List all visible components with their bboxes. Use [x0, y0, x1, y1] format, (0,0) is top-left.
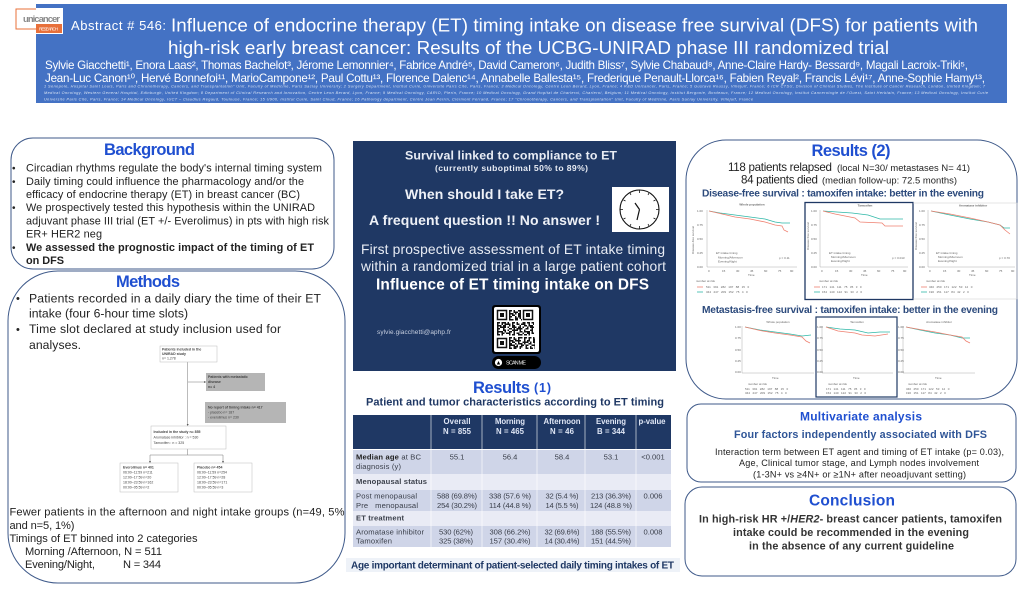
chart: DFS aromatase inhibitor: 0.50: [919, 237, 925, 241]
relapse and death counts: 84 patients died: [741, 174, 818, 186]
flowchart: placebo arm: 12:00–17:59 n=28: [197, 476, 225, 480]
heading: multivariate analysis: Multivariate analysis: [800, 410, 922, 424]
chart: MFS whole population: [735, 320, 814, 395]
chart: MFS tamoxifen (highlighted): 0.50: [817, 348, 823, 352]
panel: conclusion: [685, 487, 1016, 576]
chart: DFS whole population: 0.75: [697, 223, 703, 227]
chart: DFS whole population: Evening/Night: [718, 260, 737, 264]
flowchart: placebo arm: Placebo n= 454: [197, 466, 222, 470]
chart: DFS whole population: 15: [722, 269, 726, 273]
table rows: post and pre menopausal: 213 (36.3%): [591, 492, 631, 500]
flowchart: placebo arm: 06:00–11:59 n=254: [197, 470, 227, 474]
table row: median age: 58.4: [555, 452, 569, 462]
table header row: N = 465: [496, 427, 525, 436]
chart: MFS aromatase inhibitor: [898, 320, 975, 395]
table row: menopausal status: Menopausal status: [356, 477, 427, 486]
chart: MFS aromatase inhibitor: 190 151 117 84 42 2 0: [906, 391, 946, 395]
table rows: post and pre menopausal: 32 (5.4 %): [546, 492, 579, 500]
chart: DFS whole population: Whole population: [739, 202, 765, 206]
relapse and death counts: 118 patients relapsed: [728, 161, 832, 174]
chart: DFS aromatase inhibitor: ET intake timing: [936, 251, 958, 255]
chart: MFS whole population: Time: [772, 376, 779, 380]
chart: MFS tamoxifen (highlighted): 0.00: [817, 370, 823, 374]
chart: MFS whole population: 511 391 282 197 88 15 0: [745, 387, 788, 391]
affiliations: Medical Oncology, Western General Hospital, Edinburgh, United Kingdom; 8 Department of Clinical Research and Innovation, Centre Leon Berard, Lyon, France; 9 Medical Oncology, CARIO, Plerin, France; 10 Medical Oncology, Grand Hopital de Charleroi, Charleroi, Belgium; 11 Medical Oncology, Institut Bergonie, Bordeaux, France; 12 Medical Oncology, Institut Cancerologie de l'Ouest, Saint Herblain, France; 13 Medical Oncology, Institut Curie: [44, 91, 988, 95]
table row: median age: Median age at BC: [356, 452, 422, 462]
table row: median age: 55.1: [450, 452, 464, 462]
table rows: aromatase inhibitor and tamoxifen: Tamoxifen: [356, 536, 392, 546]
methods bullets: •: [16, 293, 20, 305]
table rows: aromatase inhibitor and tamoxifen: 188 (55.5%): [591, 528, 631, 536]
chart: DFS tamoxifen (highlighted): 90: [903, 269, 907, 273]
chart: DFS whole population: 511 391 282 197 88 15 0: [706, 285, 749, 289]
authors: Sylvie Giacchetti¹, Enora Laas², Thomas Bachelot³, Jérome Lemonnier⁴, Fabrice André⁵, David Cameron⁶, Judith Bliss⁷, Sylvie Chabaud⁸, Anne-Claire Hardy- Bessard⁹, Magali Lacroix-Triki⁵,: [45, 59, 968, 72]
chart: MFS tamoxifen (highlighted): Time: [853, 376, 860, 380]
title: Abstract # 546:: [71, 18, 166, 33]
table header row: [443, 417, 666, 436]
flowchart: patients included: [160, 346, 217, 362]
chart: MFS whole population: number at risk: [748, 382, 768, 386]
chart: MFS aromatase inhibitor: 1.00: [898, 325, 904, 329]
background bullet list: efficacy of endocrine therapy (ET) in breast cancer (BC): [26, 189, 300, 201]
study description: [360, 242, 666, 294]
table header row: Afternoon: [544, 417, 581, 426]
methods summary text: N = 344: [123, 559, 161, 571]
table rows: aromatase inhibitor and tamoxifen: [356, 528, 662, 546]
flowchart: patients included: n= 1,278: [162, 356, 176, 360]
chart: DFS aromatase inhibitor: 0.75: [919, 223, 925, 227]
flowchart: everolimus arm: [120, 463, 178, 492]
table row: median age: diagnosis (y): [356, 462, 401, 471]
table rows: aromatase inhibitor and tamoxifen: 14 (30.4%): [544, 536, 580, 546]
chart: DFS aromatase inhibitor: [913, 203, 1017, 299]
chart: DFS tamoxifen (highlighted): 60: [877, 269, 881, 273]
background bullet list: on DFS: [26, 255, 64, 267]
chart: DFS whole population: 0.25: [697, 251, 703, 255]
chart: DFS whole population: 0.00: [697, 265, 703, 269]
methods bullets: analyses.: [29, 338, 81, 352]
chart: MFS tamoxifen (highlighted): 171 141 111 75 35 3 0: [826, 387, 866, 391]
methods summary text: and n=5, 1%): [10, 520, 74, 532]
chart: MFS aromatase inhibitor: 0.50: [898, 348, 904, 352]
chart: DFS aromatase inhibitor: Aromatase inhibitor: [959, 204, 988, 208]
chart: MFS aromatase inhibitor: number at risk: [908, 382, 928, 386]
chart: MFS whole population: 1.00: [735, 325, 741, 329]
chart: DFS aromatase inhibitor: 30: [957, 269, 961, 273]
table row: ET treatment: ET treatment: [356, 514, 404, 522]
methods summary text: Evening/Night,: [25, 559, 95, 571]
flowchart: patients included: UNIRAD study: [162, 352, 186, 356]
compliance heading: (currently suboptimal 50% to 89%): [435, 163, 588, 173]
chart: DFS whole population: number at risk: [696, 279, 716, 283]
multivariate text: (1-3N+ vs ≥4N+ or ≥1N+ after neoadjuvant setting): [753, 470, 966, 480]
study description: First prospective assessment of ET intake timing: [361, 242, 665, 257]
chart: DFS tamoxifen (highlighted): Morning/Afternoon: [831, 255, 856, 259]
table row: median age: <0.001: [641, 452, 665, 462]
chart: DFS tamoxifen (highlighted): Evening/Night: [831, 259, 850, 263]
table rows: aromatase inhibitor and tamoxifen: 530 (62%): [439, 528, 473, 536]
chart: MFS whole population: 0.00: [735, 370, 741, 374]
flowchart: metastatic exclusion: disease: [208, 380, 221, 384]
chart: DFS aromatase inhibitor: 90: [1011, 269, 1015, 273]
chart: DFS aromatase inhibitor: 75: [999, 269, 1003, 273]
methods bullets: •: [16, 324, 20, 336]
results 1 heading: [366, 379, 664, 408]
chart: MFS aromatase inhibitor: Time: [935, 376, 942, 380]
methods bullets: Patients recorded in a daily diary the time of their ET: [29, 292, 322, 306]
conclusion text: in the absence of any current guideline: [749, 540, 954, 552]
multivariate text: Interaction term between ET agent and timing of ET intake (p= 0.03),: [715, 447, 1004, 457]
panel: survival and compliance: [353, 141, 676, 371]
flowchart: everolimus arm: Everolimus n= 401: [123, 466, 154, 470]
background bullet list: We assessed the prognostic impact of the timing of ET: [26, 242, 314, 254]
compliance heading: [405, 148, 617, 173]
chart: DFS whole population: 60: [764, 269, 768, 273]
chart: DFS tamoxifen (highlighted): 30: [849, 269, 853, 273]
table header row: p-value: [638, 417, 666, 426]
question text: When should I take ET?: [405, 186, 564, 202]
chart: MFS tamoxifen (highlighted): Tamoxifen: [850, 320, 864, 324]
chart: DFS tamoxifen (highlighted): ET intake timing: [829, 251, 851, 255]
chart: DFS tamoxifen (highlighted): number at risk: [819, 279, 839, 283]
chart: DFS tamoxifen (highlighted): 154 140 122 91 33 2 0: [822, 290, 862, 294]
chart: DFS whole population: 90: [790, 269, 794, 273]
title: [71, 14, 978, 58]
chart: MFS aromatase inhibitor: 340 250 171 122 53 12 0: [906, 387, 950, 391]
conclusion text: In high-risk HR +/HER2- breast cancer patients, tamoxifen: [699, 514, 1002, 526]
icon: QR code: [492, 305, 541, 354]
chart: DFS aromatase inhibitor: 0.00: [919, 265, 925, 269]
chart: MFS whole population: Whole population: [766, 320, 790, 324]
chart: MFS whole population: 0.75: [735, 336, 741, 340]
compliance heading: Survival linked to compliance to ET: [405, 148, 617, 162]
table rows: post and pre menopausal: [356, 492, 662, 510]
chart: DFS tamoxifen (highlighted): Tamoxifen: [858, 204, 873, 208]
background bullet list: •: [12, 203, 16, 214]
chart: MFS tamoxifen (highlighted): 1.00: [817, 325, 823, 329]
scan me button: [492, 356, 541, 369]
contact email: sylvie.giacchetti@aphp.fr: [377, 329, 452, 336]
table rows: post and pre menopausal: 588 (69.8%): [437, 492, 477, 500]
table rows: post and pre menopausal: 0.006: [644, 492, 662, 500]
chart: DFS whole population: 0: [708, 269, 710, 273]
chart: DFS whole population: Morning/Afternoon: [718, 256, 743, 260]
heading: methods: Methods: [116, 273, 180, 291]
table rows: aromatase inhibitor and tamoxifen: 0.008: [644, 528, 662, 536]
chart: DFS whole population: Time: [748, 273, 755, 277]
multivariate text: Age, Clinical tumor stage, and Lymph nodes involvement: [739, 458, 979, 468]
table rows: aromatase inhibitor and tamoxifen: 157 (30.4%): [490, 536, 531, 546]
chart: DFS aromatase inhibitor: 0: [929, 269, 931, 273]
relapse and death counts: (median follow-up: 72.5 months): [822, 174, 957, 186]
conclusion text: intake could be recommended in the evening: [733, 527, 969, 539]
chart: DFS tamoxifen (highlighted): 1.00: [811, 209, 817, 213]
question text: [369, 186, 600, 228]
chart: DFS whole population: 45: [750, 269, 754, 273]
background bullet list: Daily timing could influence the pharmacology and/or the: [26, 176, 304, 188]
panel: results 2: [686, 140, 1017, 399]
title: high-risk early breast cancer: Results of the UCBG-UNIRAD phase III randomized trial: [168, 37, 889, 58]
panel: background: [11, 138, 334, 269]
study description: within a randomized trial in a large patient cohort: [360, 259, 666, 274]
logo: unicancer research: [15, 8, 63, 34]
relapse and death counts: (local N=30/ metastases N= 41): [837, 162, 970, 173]
chart: DFS aromatase inhibitor: Evening/Night: [938, 259, 957, 263]
background bullet list: ER+ HER2 neg: [26, 228, 102, 240]
chart: MFS aromatase inhibitor: 0.75: [898, 336, 904, 340]
background bullet list: Circadian rhythms regulate the body's internal timing system: [26, 162, 322, 174]
flowchart: included in study: [151, 426, 226, 449]
table rows: post and pre menopausal: 14 (5.5 %): [546, 501, 579, 510]
chart: DFS tamoxifen (highlighted): 15: [835, 269, 839, 273]
table header row: Morning: [495, 417, 525, 426]
flowchart: included in study: Included in the study n= 855: [154, 430, 201, 434]
chart: DFS whole population: ET intake timing: [716, 251, 738, 255]
chart: MFS whole population: 344 247 209 152 75 4 0: [745, 391, 787, 395]
chart: DFS aromatase inhibitor: 45: [971, 269, 975, 273]
table row: median age: [356, 452, 665, 471]
table rows: post and pre menopausal: Pre menopausal: [356, 501, 418, 510]
methods summary text: [10, 506, 345, 571]
chart: MFS tamoxifen (highlighted): number at risk: [828, 382, 848, 386]
methods summary text: Timings of ET binned into 2 categories: [10, 533, 198, 545]
flowchart: metastatic exclusion: Patients with metastatic: [208, 375, 248, 379]
table header row: Evening: [596, 417, 626, 426]
table: patient characteristics: [353, 415, 671, 547]
heading: background: Background: [104, 141, 195, 159]
flowchart: everolimus arm: 18:00–23:59 n=162: [123, 480, 153, 484]
chart: DFS tamoxifen (highlighted): 45: [863, 269, 867, 273]
affiliations: [44, 84, 988, 102]
flowchart: metastatic exclusion: n= 4: [208, 385, 215, 389]
authors: [45, 59, 985, 85]
table rows: post and pre menopausal: Post menopausal: [356, 492, 417, 500]
chart: MFS tamoxifen (highlighted): 0.75: [817, 336, 823, 340]
chart: DFS whole population: 75: [778, 269, 782, 273]
flowchart: placebo arm: [194, 463, 252, 492]
background bullet list: [12, 162, 330, 267]
flowchart: everolimus arm: 00:00–05:59 n=2: [123, 486, 149, 490]
methods summary text: Morning /Afternoon, N = 511: [25, 546, 162, 558]
chart: DFS tamoxifen (highlighted): [805, 202, 913, 300]
study description: Influence of ET timing intake on DFS: [376, 276, 649, 294]
header banner: [36, 4, 1007, 103]
heading: results 2: Results (2): [812, 142, 890, 160]
background bullet list: •: [12, 164, 16, 174]
methods bullets: Time slot declared at study inclusion used for: [29, 322, 281, 336]
chart: DFS aromatase inhibitor: 15: [943, 269, 947, 273]
flowchart: placebo arm: 18:00–23:59 n=171: [197, 480, 227, 484]
flowchart: included in study: Tamoxifen : n = 325: [154, 441, 184, 445]
chart: DFS tamoxifen (highlighted): 0: [821, 269, 823, 273]
chart: DFS aromatase inhibitor: 190 151 117 84 42 2 0: [929, 290, 969, 294]
relapse and death counts: [728, 161, 970, 186]
panel: multivariate analysis: [687, 404, 1016, 482]
chart: DFS tamoxifen (highlighted): 0.00: [811, 265, 817, 269]
authors: Jean-Luc Canon¹⁰, Hervé Bonnefoi¹¹, MarioCampone¹², Paul Cottu¹³, Florence Dalenc¹⁴, Annabelle Ballesta¹⁵, Frederique Penault-Llorca¹⁶, Fabien Reyal², Francis Lévi¹⁷, Anne-Sophie Hamy¹³,: [45, 72, 985, 85]
flowchart: placebo arm: 00:00–05:59 n=3: [197, 486, 223, 490]
chart: MFS tamoxifen (highlighted): [816, 317, 897, 397]
flowchart: no timing report exclusion: [205, 402, 286, 423]
background bullet list: adjuvant phase III trial (ET +/- Everolimus) in pts with high risk: [26, 216, 330, 228]
flowchart: metastatic exclusion: [206, 373, 265, 391]
conclusion text: [699, 514, 1002, 552]
chart: MFS aromatase inhibitor: 0.25: [898, 359, 904, 363]
table rows: aromatase inhibitor and tamoxifen: 151 (44.5%): [591, 536, 631, 546]
table rows: aromatase inhibitor and tamoxifen: Aromatase inhibitor: [356, 528, 424, 536]
results 1 heading: (1): [534, 381, 551, 395]
callout: age determinant: Age important determinant of patient-selected daily timing intakes of ET: [351, 560, 674, 572]
flowchart: included in study: Aromatase inhibitor : n = 530: [154, 436, 198, 440]
flowchart: no timing report exclusion: - placebo n= 187: [208, 410, 234, 414]
chart: MFS tamoxifen (highlighted): 0.25: [817, 359, 823, 363]
chart: DFS whole population: 1.00: [697, 209, 703, 213]
chart: MFS tamoxifen (highlighted): 154 140 122 91 33 2 0: [826, 391, 866, 395]
table header row: Overall: [444, 417, 470, 426]
chart: DFS whole population: Disease-free survival: [691, 226, 695, 254]
table header row: N = 855: [443, 427, 472, 436]
chart: DFS tamoxifen (highlighted): 0.75: [811, 223, 817, 227]
logo: unicancer research: RESEARCH: [39, 26, 58, 32]
chart: DFS aromatase inhibitor: Time: [969, 273, 976, 277]
flowchart: [120, 346, 286, 492]
table rows: post and pre menopausal: 114 (44.8 %): [489, 501, 531, 510]
affiliations: 1 Senopole, Hospital Saint Louis, Paris and Chronotherapy, Cancers, and Transplantation" Unit, Faculty of Medicine, Paris Saclay University; 2 Surgery Department, Institut Curie, Universite Paris Cite, Paris, France; 3 Medical Oncology, Centre Leon Berard, Lyon, France; 4 R&D Unicancer, Paris, France; 5 Gustave Roussy, Villejuif, France; 6 ICR CTSU, Division of Clinical Studies, The Institute of Cancer Research, London, United Kingdom; 7: [44, 84, 986, 88]
chart: DFS aromatase inhibitor: 340 250 171 122 53 12 0: [929, 285, 973, 289]
title: Influence of endocrine therapy (ET) timing intake on disease free survival (DFS) for patients with: [171, 14, 978, 36]
chart: DFS whole population: p = 0.11: [779, 256, 790, 260]
chart: MFS aromatase inhibitor: 0.00: [898, 370, 904, 374]
question text: A frequent question !! No answer !: [369, 212, 600, 228]
chart: DFS aromatase inhibitor: Morning/Afternoon: [938, 255, 963, 259]
panel: methods: [8, 271, 345, 583]
table rows: post and pre menopausal: 338 (57.6 %): [489, 492, 531, 500]
multivariate text: [715, 447, 1004, 480]
background bullet list: •: [12, 243, 16, 254]
methods summary text: Fewer patients in the afternoon and night intake groups (n=49, 5%: [10, 506, 345, 518]
chart: DFS aromatase inhibitor: Disease free survival: [914, 222, 918, 250]
flowchart: no timing report exclusion: No report of timing intake n= 417: [208, 406, 263, 410]
logo: unicancer research: unicancer: [23, 14, 60, 25]
table row: median age: 53.1: [604, 452, 618, 462]
chart: DFS whole population: 344 247 209 152 75 4 0: [706, 290, 748, 294]
chart: DFS tamoxifen (highlighted): 75: [891, 269, 895, 273]
chart: MFS aromatase inhibitor: Aromatase inhibitor: [926, 320, 952, 324]
chart: DFS tamoxifen (highlighted): p = 0.013: [892, 256, 905, 260]
affiliations: Universite Paris Cite, Paris, France; 14 Medical Oncology, IUCT – Claudius Regaud, Toulouse, France; 15 U900, Institut Curie, Saint Cloud, France; 16 Pathology department, Centre Jean Perrin, Clermont Ferrand, France; 17 "Chronotherapy, Cancers, and Transplantation" Unit, Faculty of Medicine, Paris Saclay University, Villejuif, France: [44, 98, 753, 102]
table rows: aromatase inhibitor and tamoxifen: 32 (69.6%): [544, 528, 580, 536]
subheading: four factors: Four factors independently associated with DFS: [734, 429, 987, 441]
table header row: B = 344: [597, 427, 626, 436]
flowchart: everolimus arm: 12:00–17:59 n=20: [123, 476, 151, 480]
chart: MFS whole population: 0.50: [735, 348, 741, 352]
chart: DFS tamoxifen (highlighted): Disease free survival: [806, 222, 810, 250]
chart: DFS tamoxifen (highlighted): 0.25: [811, 251, 817, 255]
heading: disease-free survival: Disease-free survival : tamoxifen intake: better in the evening: [702, 188, 984, 200]
table rows: post and pre menopausal: 254 (30.2%): [437, 501, 477, 510]
chart: DFS tamoxifen (highlighted): 171 141 111 75 35 3 0: [822, 285, 862, 289]
methods bullets: intake (four 6-hour time slots): [29, 306, 188, 320]
flowchart: no timing report exclusion: - everolimus n= 230: [208, 416, 239, 420]
chart: DFS tamoxifen (highlighted): Time: [861, 273, 868, 277]
chart: DFS whole population: 30: [736, 269, 740, 273]
background bullet list: We prospectively tested this hypothesis within the UNIRAD: [26, 202, 315, 214]
table header row: N = 46: [550, 427, 575, 436]
chart: DFS aromatase inhibitor: number at risk: [926, 279, 946, 283]
flowchart: everolimus arm: 06:00–11:59 n=211: [123, 470, 153, 474]
table rows: aromatase inhibitor and tamoxifen: 325 (38%): [439, 536, 473, 546]
chart: DFS tamoxifen (highlighted): 0.50: [811, 237, 817, 241]
table row: median age: 56.4: [503, 452, 517, 462]
background bullet list: •: [12, 177, 16, 188]
heading: conclusion: Conclusion: [809, 492, 895, 510]
flowchart: patients included: Patients included in the: [162, 348, 201, 352]
scan me button: SCAN ME: [506, 360, 526, 366]
chart: DFS aromatase inhibitor: 1.00: [919, 209, 925, 213]
results 1 heading: Results: [473, 379, 530, 397]
results 1 heading: Patient and tumor characteristics according to ET timing: [366, 396, 664, 408]
chart: DFS whole population: [691, 202, 797, 294]
chart: DFS aromatase inhibitor: 60: [985, 269, 989, 273]
chart: DFS whole population: 0.50: [697, 237, 703, 241]
chart: DFS aromatase inhibitor: 0.25: [919, 251, 925, 255]
table rows: post and pre menopausal: 124 (48.8 %): [590, 501, 632, 510]
methods bullets: [16, 292, 322, 352]
chart: MFS whole population: 0.25: [735, 359, 741, 363]
heading: metastasis-free survival: Metastasis-free survival : tamoxifen intake: better in the evening: [702, 305, 998, 316]
chart: DFS aromatase inhibitor: p = 0.70: [999, 256, 1010, 260]
icon: clock: [612, 187, 669, 232]
table rows: aromatase inhibitor and tamoxifen: 308 (66.2%): [490, 528, 531, 536]
